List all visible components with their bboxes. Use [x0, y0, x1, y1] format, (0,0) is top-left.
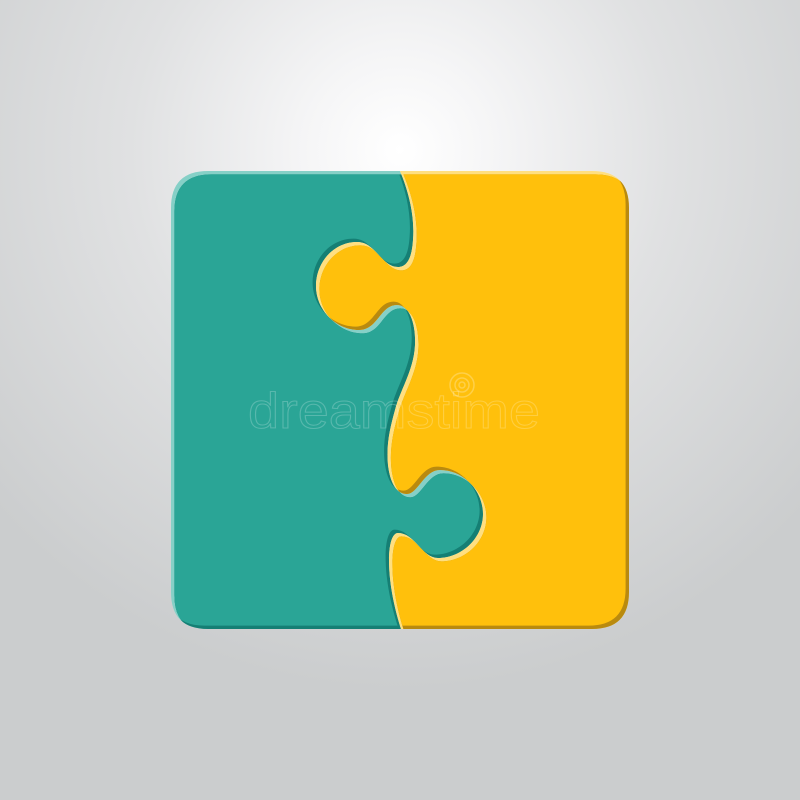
- puzzle piece: yellow right: [316, 171, 629, 629]
- watermark spiral icon: [450, 373, 474, 397]
- watermark wordmark: dreamstime: [248, 383, 540, 439]
- puzzle piece: teal left: [171, 171, 483, 629]
- infographic canvas: [66, 0, 733, 629]
